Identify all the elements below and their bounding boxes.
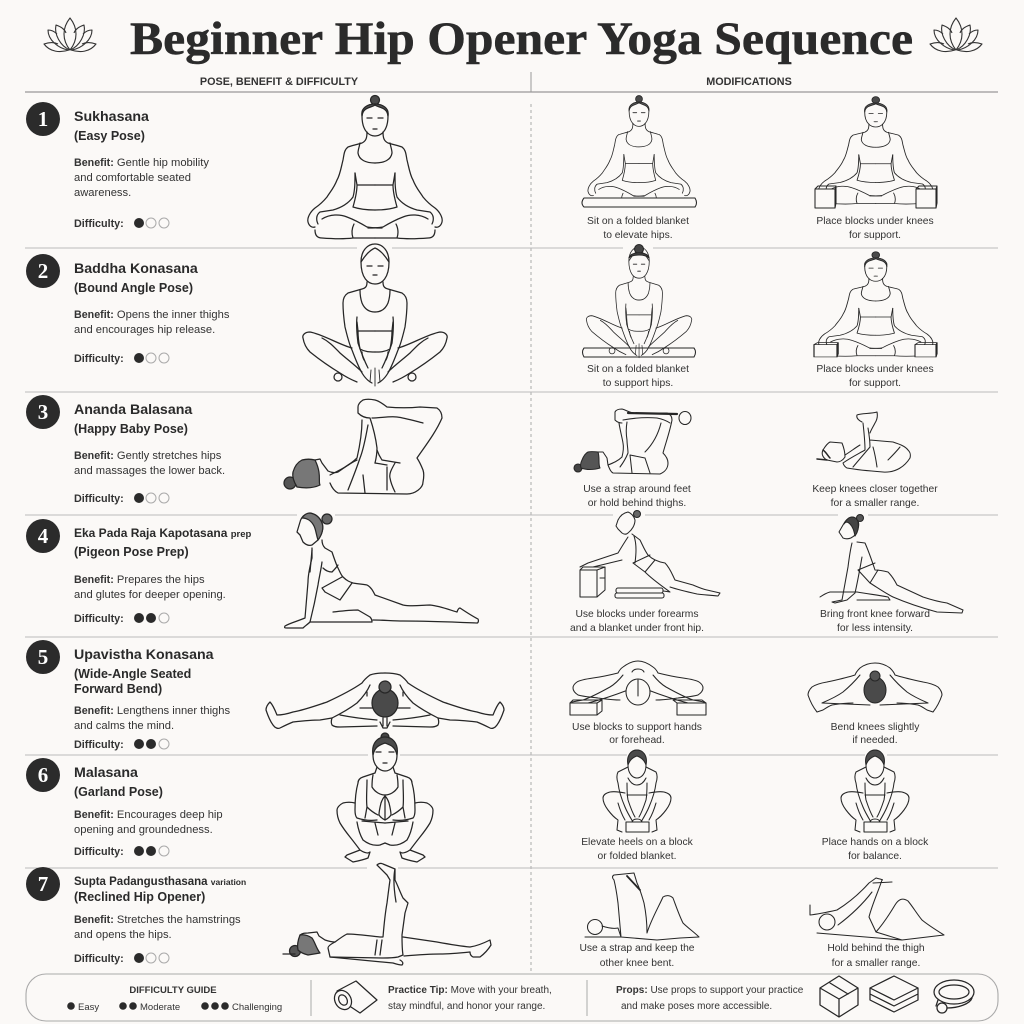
- panel: pose 1 Sukhasana: [26, 96, 937, 241]
- props note: Props: Use props to support your practice: [616, 985, 804, 996]
- panel: pose 5 Upavistha Konasana: or forehead.: [609, 735, 665, 746]
- panel: pose 5 Upavistha Konasana: Forward Bend): [74, 682, 162, 696]
- panel: pose 2 Baddha Konasana: [26, 244, 937, 389]
- panel: pose 7 Supta Padangusthasana: [26, 863, 944, 969]
- icon: yoga block: [820, 976, 858, 1017]
- modification: bent knees: [808, 663, 942, 712]
- panel: pose 3 Ananda Balasana: for a smaller range.: [831, 498, 919, 509]
- panel: pose 1 Sukhasana: Benefit: Gentle hip mobility: [74, 157, 209, 169]
- icon: strap: [934, 980, 974, 1013]
- modification: hands on block: [841, 750, 909, 832]
- heading text: Beginner Hip Opener Yoga Sequence: [130, 13, 913, 65]
- modification: hold behind thigh: [810, 878, 944, 940]
- figure: wide-angle forward bend: [266, 673, 504, 728]
- panel: pose 2 Baddha Konasana: 2: [38, 259, 48, 283]
- panel: pose 2 Baddha Konasana: to support hips.: [603, 378, 673, 389]
- column headers: MODIFICATIONS: [706, 76, 792, 88]
- panel: pose 5 Upavistha Konasana: 5: [38, 645, 48, 669]
- panel: pose 4 Pigeon prep: Use blocks under forearms: [575, 609, 699, 620]
- panel: pose 1 Sukhasana: to elevate hips.: [603, 230, 673, 241]
- panel: pose 1 Sukhasana: awareness.: [74, 187, 131, 199]
- panel: pose 1 Sukhasana: Sukhasana: [74, 109, 149, 125]
- difficulty guide legend: Challenging: [232, 1002, 282, 1013]
- panel: pose 4 Pigeon prep: Benefit: Prepares the hips: [74, 574, 205, 586]
- panel: pose 3 Ananda Balasana: Benefit: Gently stretches hips: [74, 450, 222, 462]
- icon: folded blankets: [870, 976, 918, 1012]
- panel: pose 4 Pigeon prep: (Pigeon Pose Prep): [74, 545, 189, 559]
- panel: pose 2 Baddha Konasana: and encourages hip release.: [74, 324, 215, 336]
- modification: blocks: [815, 97, 937, 208]
- panel: pose 1 Sukhasana: (Easy Pose): [74, 129, 145, 143]
- panel: pose 7 Supta Padangusthasana: 7: [38, 872, 48, 896]
- panel: pose 1 Sukhasana: Sit on a folded blanket: [587, 216, 689, 227]
- panel: pose 2 Baddha Konasana: Difficulty:: [74, 353, 124, 365]
- figure: pigeon prep: [285, 513, 478, 628]
- panel: pose 6 Malasana: [26, 733, 929, 862]
- panel: pose 4 Pigeon prep: and a blanket under front hip.: [570, 623, 704, 634]
- panel: pose 3 Ananda Balasana: Difficulty:: [74, 493, 124, 505]
- panel: pose 3 Ananda Balasana: and massages the lower back.: [74, 465, 225, 477]
- practice tip: stay mindful, and honor your range.: [388, 1001, 545, 1012]
- modification: strap: [585, 873, 699, 940]
- difficulty guide legend: [67, 985, 282, 1013]
- panel: pose 4 Pigeon prep: and glutes for deeper opening.: [74, 589, 226, 601]
- panel: pose 6 Malasana: or folded blanket.: [598, 851, 676, 862]
- panel: pose 2 Baddha Konasana: Place blocks under knees: [816, 364, 934, 375]
- panel: pose 5 Upavistha Konasana: [26, 640, 942, 751]
- panel: pose 1 Sukhasana: for support.: [849, 230, 901, 241]
- panel: pose 5 Upavistha Konasana: Difficulty:: [74, 739, 124, 751]
- difficulty guide legend: DIFFICULTY GUIDE: [129, 985, 217, 996]
- panel: pose 1 Sukhasana: 1: [38, 107, 48, 131]
- panel: pose 4 Pigeon prep: for less intensity.: [837, 623, 913, 634]
- modification: front knee forward: [820, 514, 963, 613]
- panel: pose 6 Malasana: Difficulty:: [74, 846, 124, 858]
- panel: pose 7 Supta Padangusthasana: Hold behind the thigh: [827, 943, 925, 954]
- modification: blanket: [582, 244, 696, 358]
- panel: pose 4 Pigeon prep: 4: [38, 524, 49, 548]
- panel: pose 4 Pigeon prep: [26, 510, 963, 634]
- panel: pose 3 Ananda Balasana: 3: [38, 400, 48, 424]
- panel: pose 2 Baddha Konasana: Benefit: Opens the inner thighs: [74, 309, 230, 321]
- panel: pose 3 Ananda Balasana: Keep knees closer together: [812, 484, 938, 495]
- figure: happy baby pose: [284, 399, 442, 494]
- difficulty guide legend: Easy: [78, 1002, 99, 1013]
- panel: pose 5 Upavistha Konasana: and calms the mind.: [74, 720, 174, 732]
- panel: pose 7 Supta Padangusthasana: Use a strap and keep the: [579, 943, 695, 954]
- figure: easy pose: [308, 96, 442, 239]
- panel: pose 6 Malasana: opening and groundedness.: [74, 824, 213, 836]
- icon: lotus right: [930, 18, 982, 52]
- panel: pose 6 Malasana: for balance.: [848, 851, 902, 862]
- panel: pose 7 Supta Padangusthasana: other knee bent.: [600, 958, 674, 969]
- props note: [616, 985, 804, 1012]
- panel: pose 2 Baddha Konasana: (Bound Angle Pose): [74, 281, 193, 295]
- panel: pose 2 Baddha Konasana: Baddha Konasana: [74, 261, 198, 277]
- panel: pose 6 Malasana: (Garland Pose): [74, 785, 163, 799]
- panel: pose 6 Malasana: Malasana: [74, 765, 138, 781]
- panel: pose 7 Supta Padangusthasana: Supta Padangusthasana variation: [74, 876, 246, 888]
- panel: pose 5 Upavistha Konasana: Bend knees slightly: [831, 722, 920, 733]
- panel: pose 7 Supta Padangusthasana: Benefit: Stretches the hamstrings: [74, 914, 241, 926]
- panel: pose 3 Ananda Balasana: Use a strap around feet: [583, 484, 691, 495]
- modification: blanket: [582, 96, 696, 207]
- modification: heels on block: [603, 750, 671, 832]
- panel: pose 5 Upavistha Konasana: (Wide-Angle Seated: [74, 667, 191, 681]
- panel: pose 5 Upavistha Konasana: if needed.: [852, 735, 898, 746]
- icon: rolled mat: [331, 981, 377, 1013]
- modification: block and blanket: [580, 510, 720, 598]
- panel: pose 1 Sukhasana: and comfortable seated: [74, 172, 191, 184]
- figure: garland pose: [337, 733, 433, 862]
- panel: footer guide: [26, 974, 998, 1021]
- modification: knees together: [817, 412, 910, 472]
- panel: pose 1 Sukhasana: Place blocks under knees: [816, 216, 934, 227]
- difficulty guide legend: Moderate: [140, 1002, 180, 1013]
- panel: pose 1 Sukhasana: Difficulty:: [74, 218, 124, 230]
- modification: strap: [574, 409, 691, 474]
- panel: pose 5 Upavistha Konasana: Use blocks to support hands: [572, 722, 702, 733]
- panel: pose 5 Upavistha Konasana: Upavistha Konasana: [74, 647, 214, 663]
- icon: lotus left: [44, 18, 96, 52]
- panel: pose 3 Ananda Balasana: Ananda Balasana: [74, 402, 192, 418]
- modification: blocks: [814, 252, 937, 357]
- practice tip: [388, 985, 552, 1012]
- props note: and make poses more accessible.: [621, 1001, 772, 1012]
- panel: pose 6 Malasana: Elevate heels on a block: [581, 837, 694, 848]
- panel: pose 6 Malasana: Benefit: Encourages deep hip: [74, 809, 223, 821]
- panel: pose 3 Ananda Balasana: [26, 395, 938, 509]
- panel: pose 3 Ananda Balasana: or hold behind thighs.: [588, 498, 686, 509]
- title: [44, 13, 982, 65]
- figure: reclined hamstring stretch: [283, 863, 491, 965]
- panel: pose 3 Ananda Balasana: (Happy Baby Pose): [74, 422, 188, 436]
- figure: bound angle pose: [303, 244, 447, 386]
- panel: pose 2 Baddha Konasana: Sit on a folded blanket: [587, 364, 689, 375]
- practice tip: Practice Tip: Move with your breath,: [388, 985, 552, 996]
- panel: pose 4 Pigeon prep: Difficulty:: [74, 613, 124, 625]
- modification: blocks: [570, 661, 706, 715]
- panel: pose 7 Supta Padangusthasana: for a smaller range.: [832, 958, 920, 969]
- panel: pose 7 Supta Padangusthasana: and opens the hips.: [74, 929, 172, 941]
- column headers: POSE, BENEFIT & DIFFICULTY: [200, 76, 359, 88]
- panel: pose 5 Upavistha Konasana: Benefit: Lengthens inner thighs: [74, 705, 230, 717]
- panel: pose 4 Pigeon prep: Eka Pada Raja Kapotasana prep: [74, 526, 252, 540]
- panel: pose 7 Supta Padangusthasana: (Reclined Hip Opener): [74, 890, 205, 904]
- panel: pose 4 Pigeon prep: Bring front knee forward: [820, 609, 930, 620]
- panel: pose 2 Baddha Konasana: for support.: [849, 378, 901, 389]
- panel: pose 6 Malasana: 6: [38, 763, 48, 787]
- column headers: [25, 72, 998, 92]
- panel: pose 7 Supta Padangusthasana: Difficulty:: [74, 953, 124, 965]
- panel: pose 6 Malasana: Place hands on a block: [822, 837, 929, 848]
